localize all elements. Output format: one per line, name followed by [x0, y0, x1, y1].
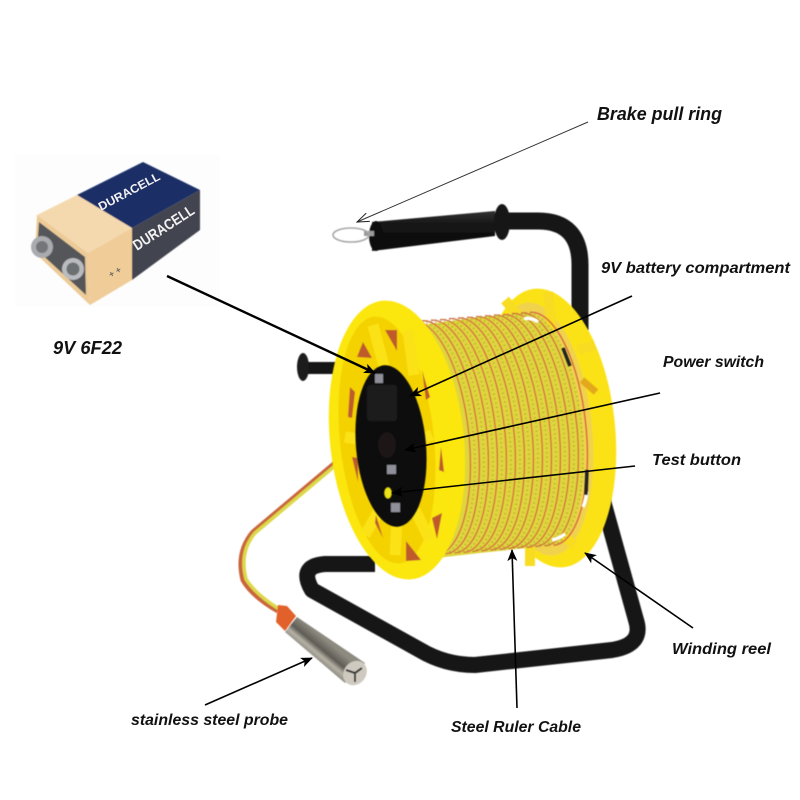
orange connector — [276, 605, 296, 631]
wedge openings — [348, 330, 444, 561]
battery side brand: DURACELL — [130, 202, 198, 254]
label: stainless steel probe: stainless steel probe — [131, 712, 288, 729]
battery background — [15, 155, 220, 307]
battery photo — [15, 155, 220, 307]
arrow: 9V battery compartment — [410, 296, 632, 396]
rear flange spokes — [505, 292, 595, 566]
outer rim — [316, 294, 478, 586]
control hub — [349, 362, 433, 530]
rear flange inner face — [475, 297, 605, 561]
battery body — [31, 162, 200, 305]
handle tube — [505, 221, 580, 330]
test button — [384, 488, 392, 498]
label: brake pull ring: Brake pull ring — [597, 104, 722, 124]
pull ring — [333, 228, 369, 242]
base frame — [307, 490, 638, 665]
grip — [372, 211, 495, 251]
arrow: steel ruler cable — [512, 550, 517, 708]
orange stripes — [413, 312, 587, 554]
label: winding reel: Winding reel — [672, 641, 772, 658]
label: power switch: Power switch — [663, 354, 764, 371]
front flange — [316, 294, 478, 586]
cable drum — [413, 312, 587, 558]
label: test button: Test button — [652, 452, 741, 469]
rear flange — [469, 282, 629, 574]
stainless steel probe — [276, 605, 372, 690]
metal stand and handle — [307, 204, 638, 665]
label: 9V 6F22: 9V 6F22 — [53, 338, 122, 358]
pull pin — [364, 231, 374, 236]
battery markings: + + — [107, 264, 124, 280]
battery compartment — [367, 385, 397, 421]
arrow: power switch — [405, 393, 660, 450]
battery top brand: DURACELL — [96, 169, 162, 214]
arrow: test button — [392, 466, 635, 493]
rear flange slots — [524, 318, 596, 540]
scale ticks — [418, 313, 583, 554]
screw — [391, 503, 400, 512]
arrow: battery to compartment — [167, 276, 375, 373]
arrow: stainless steel probe — [205, 658, 312, 705]
screw — [387, 465, 396, 474]
spokes — [345, 325, 432, 555]
grip end — [369, 221, 383, 251]
steel body — [285, 617, 365, 683]
grip collar — [494, 204, 510, 240]
power switch — [378, 432, 396, 458]
cable to probe — [241, 463, 336, 611]
inner face — [327, 312, 447, 568]
arrow: winding reel — [585, 553, 693, 628]
label: steel ruler cable: Steel Ruler Cable — [451, 719, 581, 736]
locking knob — [297, 353, 345, 381]
end cap — [338, 656, 372, 690]
screw — [375, 374, 383, 383]
arrow: brake pull ring — [357, 122, 588, 222]
label: 9V battery compartment: 9V battery compartment — [601, 260, 791, 277]
black hub plate — [349, 362, 433, 530]
